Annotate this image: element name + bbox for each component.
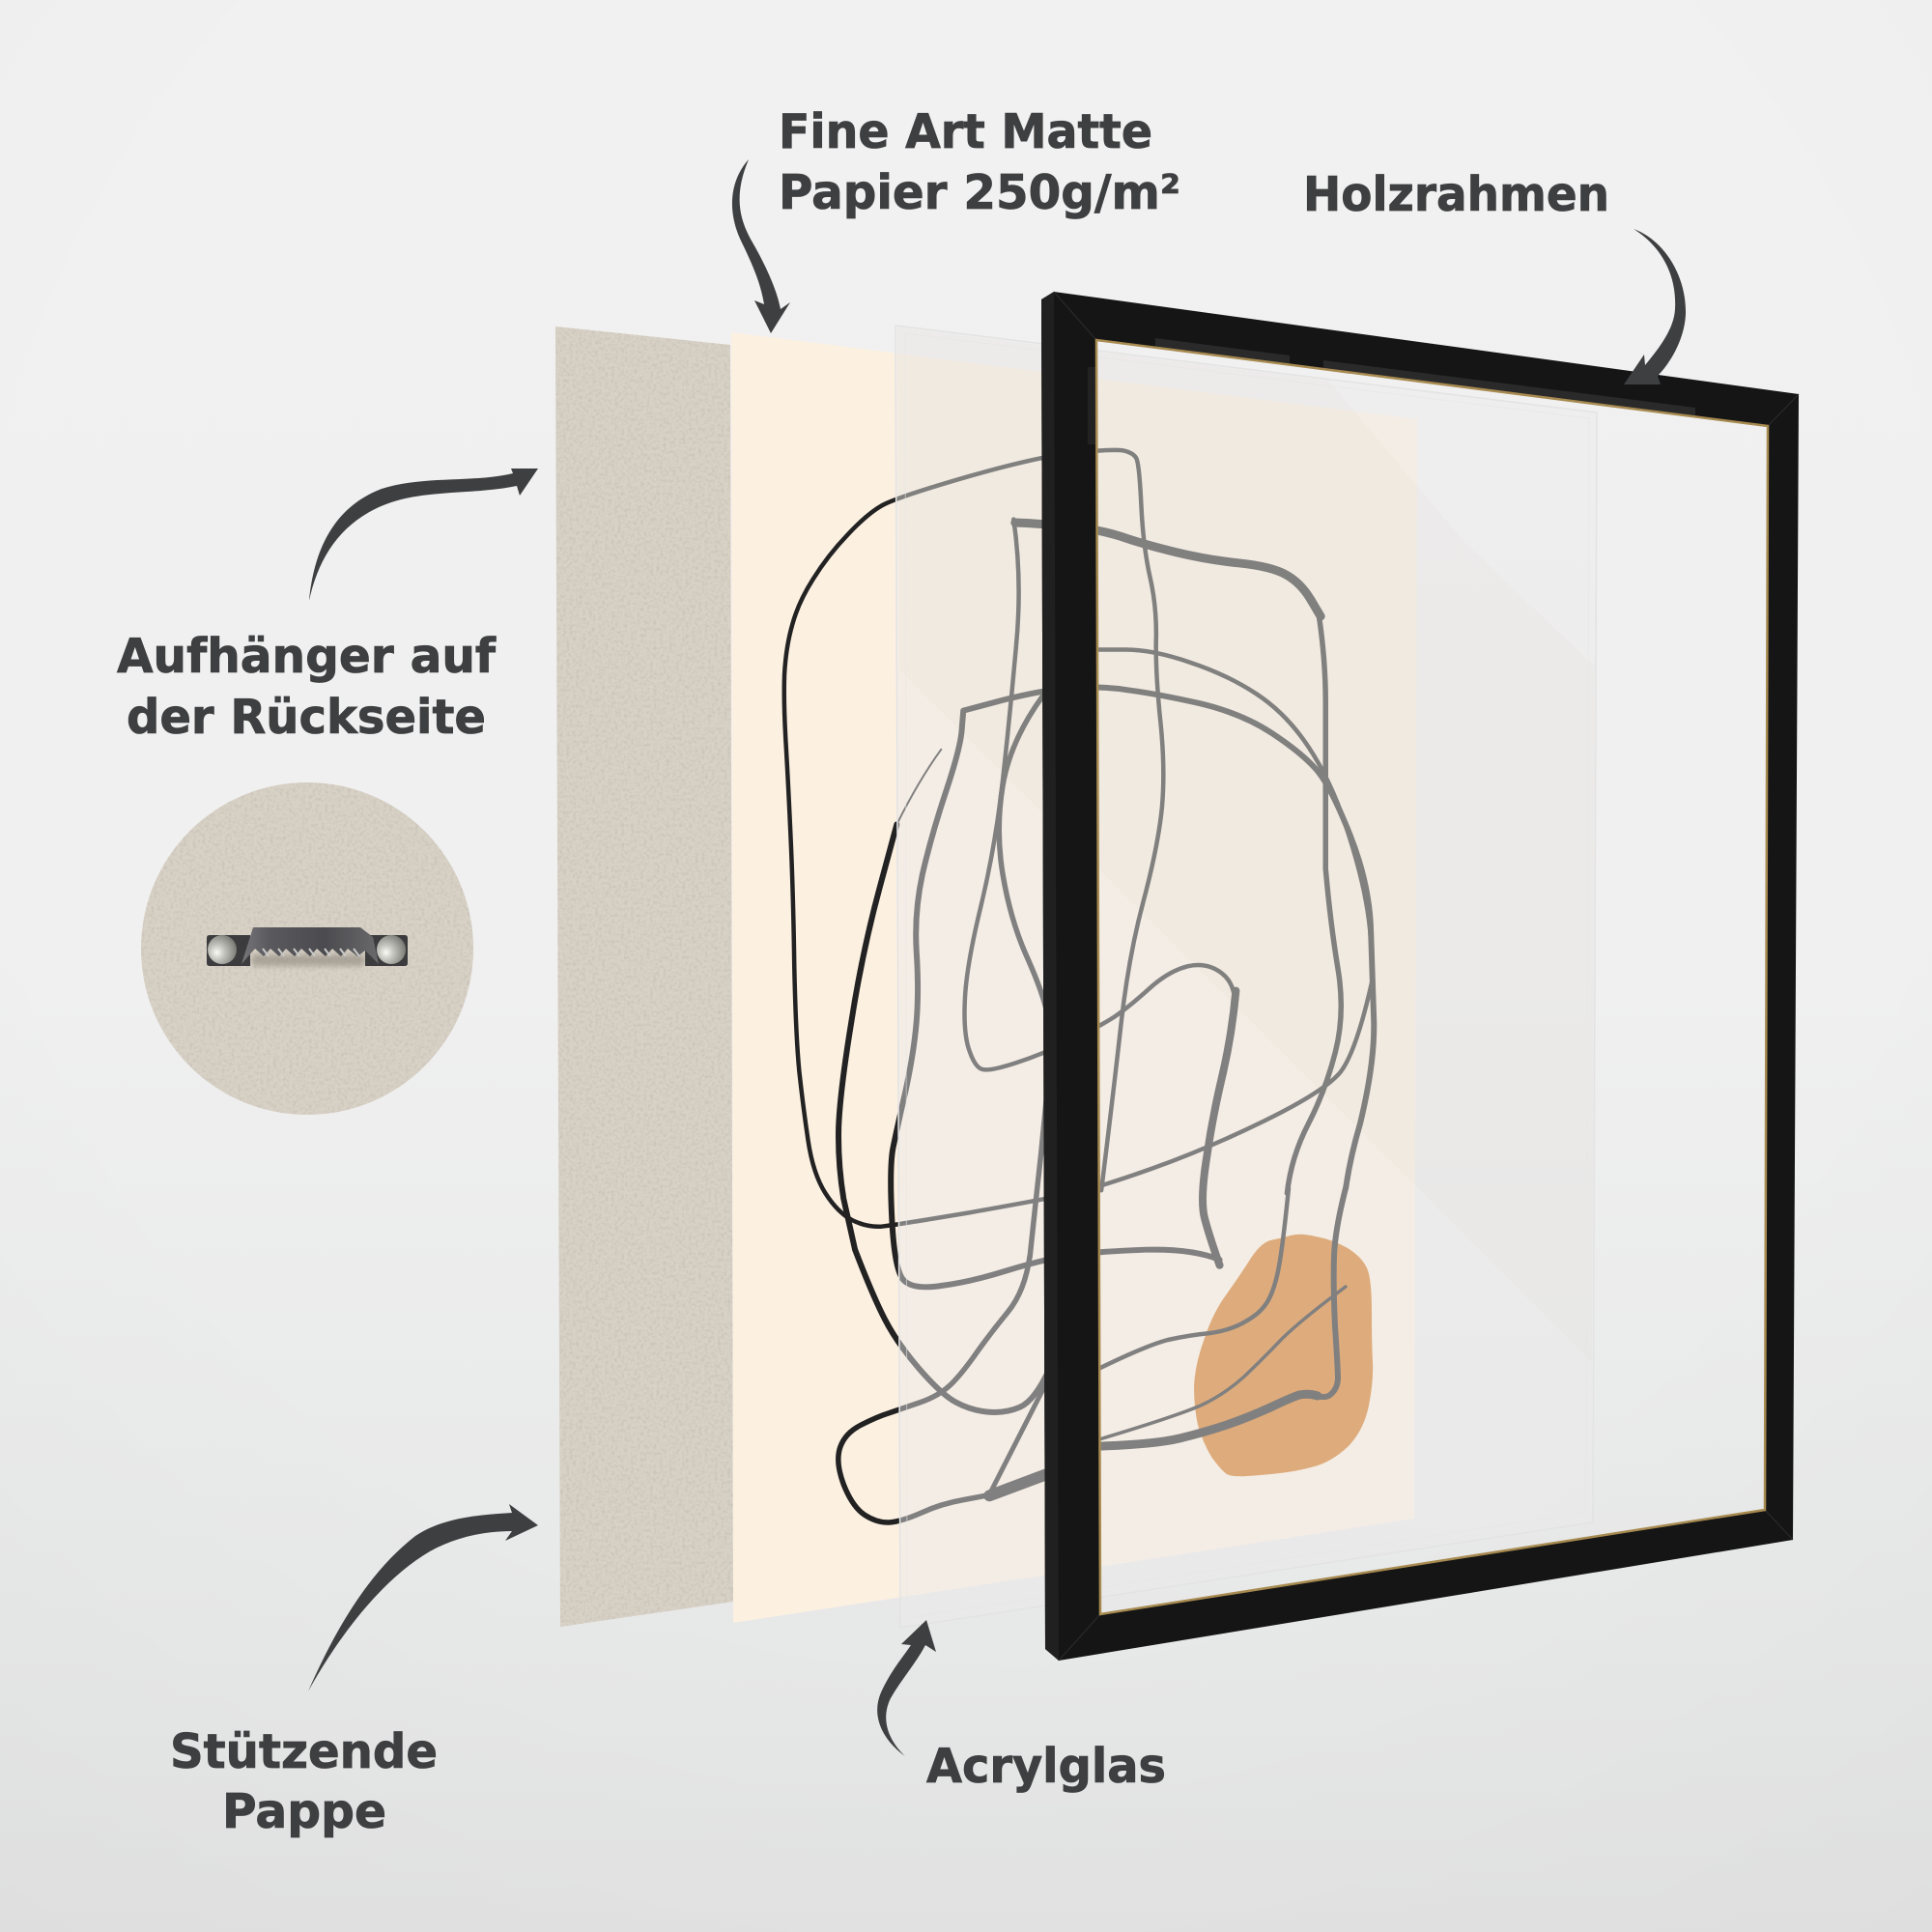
frame side bevel [1041,292,1059,1661]
paper sheet [731,332,1417,1623]
label: Stützende Pappe [170,1724,438,1839]
label: Aufhänger auf der Rückseite [117,629,497,745]
label: Aufhänger auf der Rückseite: der Rückseite [127,690,486,745]
label: Fine Art Matte Papier [779,104,1180,220]
label: Aufhänger auf der Rückseite: Aufhänger auf [117,629,497,684]
panel: acrylic glass sheet [895,326,1597,1628]
label: Stützende Pappe: Pappe [222,1784,386,1839]
label: Fine Art Matte Papier: Fine Art Matte [779,104,1152,159]
hanger feet [207,935,408,966]
label: Stützende Pappe: Stützende [170,1724,438,1779]
icon: sawtooth hanger on cardboard circle [141,782,473,1115]
cardboard circle [141,782,473,1115]
hanger shadow [251,954,365,966]
artwork: orange blob [1194,1235,1373,1476]
arrow: Fine Art paper [732,159,790,333]
arrow: Aufhänger [309,469,538,601]
hanger teeth [263,949,359,956]
label: Holzrahmen: Holzrahmen [1303,167,1609,222]
hanger bridge [242,927,379,964]
label: Acrylglas: Acrylglas [926,1739,1166,1794]
hanger rivets [208,935,406,964]
arrow: Stützende Pappe [308,1504,538,1691]
frame gold inner edge [1096,340,1768,1614]
panel: fine art paper with artwork [731,332,1417,1623]
artwork: upper line drawing [784,450,1374,1287]
panel: black wooden frame [1041,292,1799,1661]
artwork: lower left line drawing [838,1249,1050,1522]
label: Fine Art Matte Papier: Papier 250g/m² [779,165,1180,220]
artwork: lower right line drawing [1096,1188,1346,1446]
arrow: Acrylglas [877,1620,936,1756]
panel: cardboard backing sheet [555,327,733,1627]
arrow: Holzrahmen [1624,229,1686,384]
